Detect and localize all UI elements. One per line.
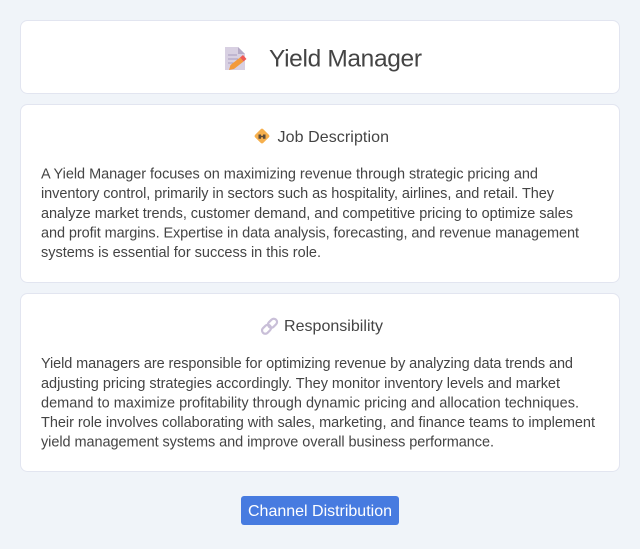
heading: job description: Job Description	[278, 129, 389, 146]
button: channel distribution: Channel Distribution	[248, 503, 392, 520]
text block: job description: A Yield Manager focuses on maximizing revenue through strategic pricing and	[41, 166, 538, 182]
title: Yield Manager	[269, 46, 422, 72]
text block: responsibility: Yield managers are responsible for optimizing revenue by analyzing data trends and	[41, 356, 573, 372]
text block: job description: inventory control, primarily in sectors such as hospitality, airlines, and retail. They	[41, 186, 555, 202]
button: channel distribution	[241, 496, 399, 525]
panel: title card	[20, 20, 620, 94]
panel: job description	[20, 104, 620, 282]
icon: chain link	[261, 317, 278, 335]
text block: responsibility: Their role involves collaborating with sales, marketing, and finance teams to implement	[41, 415, 595, 431]
panel: responsibility	[20, 294, 620, 472]
heading: responsibility: Responsibility	[284, 318, 383, 335]
text block: responsibility: adjusting pricing strategies accordingly. They monitor inventory levels and market	[41, 376, 560, 392]
icon: orange diamond	[254, 128, 270, 144]
text block: responsibility: yield management systems and improve overall business performance.	[41, 434, 494, 450]
text block: job description: analyze market trends, customer demand, and competitive pricing to optimize sales	[41, 206, 573, 222]
text block: job description	[41, 166, 579, 261]
text block: responsibility	[41, 356, 595, 450]
text block: job description: systems is essential for success in this role.	[41, 245, 321, 261]
text block: job description: and profit margins. Expertise in data analysis, forecasting, and revenue management	[41, 226, 579, 242]
text block: responsibility: demand to maximize profitability through dynamic pricing and allocation techniques.	[41, 396, 579, 412]
icon: document with pencil	[225, 47, 246, 70]
